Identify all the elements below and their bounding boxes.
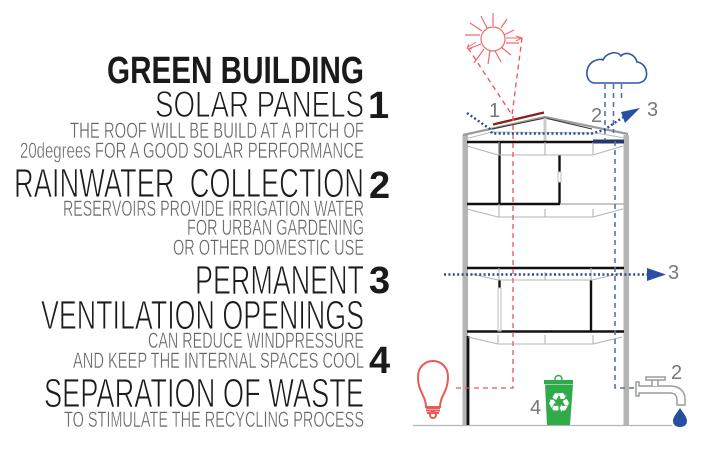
diagram number 2: roof: 2 [591, 105, 602, 127]
grey structure [467, 142, 624, 344]
roof [463, 117, 628, 141]
rainwater pipe line [605, 84, 634, 388]
ventilation arrow: roof [467, 108, 640, 134]
number 4: 4 [369, 340, 390, 382]
outer walls [462, 135, 629, 425]
diagram number 2: tap: 2 [671, 362, 682, 384]
title: GREEN BUILDING [107, 50, 364, 92]
heading: separation of waste: SEPARATION OF WASTE [44, 370, 364, 416]
red sun path line [452, 38, 522, 388]
icon: water tap [636, 377, 685, 405]
diagram number 3: roof: 3 [647, 99, 658, 121]
floor slabs and inner walls [467, 142, 624, 425]
text: solar line 2: 20degrees FOR A GOOD SOLAR PERFORMANCE [20, 138, 364, 163]
number 3: 3 [369, 260, 390, 302]
icon: cloud [587, 53, 647, 83]
text: rainwater line 2: FOR URBAN GARDENING [187, 215, 364, 240]
number 1: 1 [368, 85, 389, 127]
text: rainwater line 1: RESERVOIRS PROVIDE IRRIGATION WATER [63, 196, 364, 221]
text: solar line 1: THE ROOF WILL BE BUILD AT A PITCH OF [70, 118, 364, 143]
icon: light bulb [418, 361, 448, 418]
text: rainwater line 3: OR OTHER DOMESTIC USE [173, 235, 364, 260]
icon: sun [465, 13, 522, 64]
solar panel [493, 112, 544, 124]
heading: rainwater collection: RAINWATER COLLECTION [14, 160, 364, 206]
text: ventilation line 1: CAN REDUCE WINDPRESSURE [148, 328, 364, 353]
icon: recycling symbol: ♻ [547, 388, 571, 419]
ground line [413, 424, 672, 426]
text column [14, 50, 390, 432]
text: ventilation line 2: AND KEEP THE INTERNAL SPACES COOL [73, 348, 364, 373]
text: waste line: TO STIMULATE THE RECYCLING PROCESS [64, 407, 364, 432]
icon: recycling bin [544, 376, 573, 425]
ventilation arrow: floor [444, 268, 666, 281]
diagram number 3: floor: 3 [668, 262, 679, 284]
heading: ventilation openings: VENTILATION OPENINGS [41, 292, 364, 338]
water reservoir [593, 140, 624, 144]
number 2: 2 [369, 165, 390, 207]
building section [413, 13, 687, 427]
diagram number 4: 4 [530, 397, 541, 419]
heading: solar panels: SOLAR PANELS [155, 84, 364, 125]
diagram number 1: 1 [489, 100, 500, 122]
icon: water drop [673, 408, 687, 427]
heading: permanent: PERMANENT [195, 257, 364, 303]
